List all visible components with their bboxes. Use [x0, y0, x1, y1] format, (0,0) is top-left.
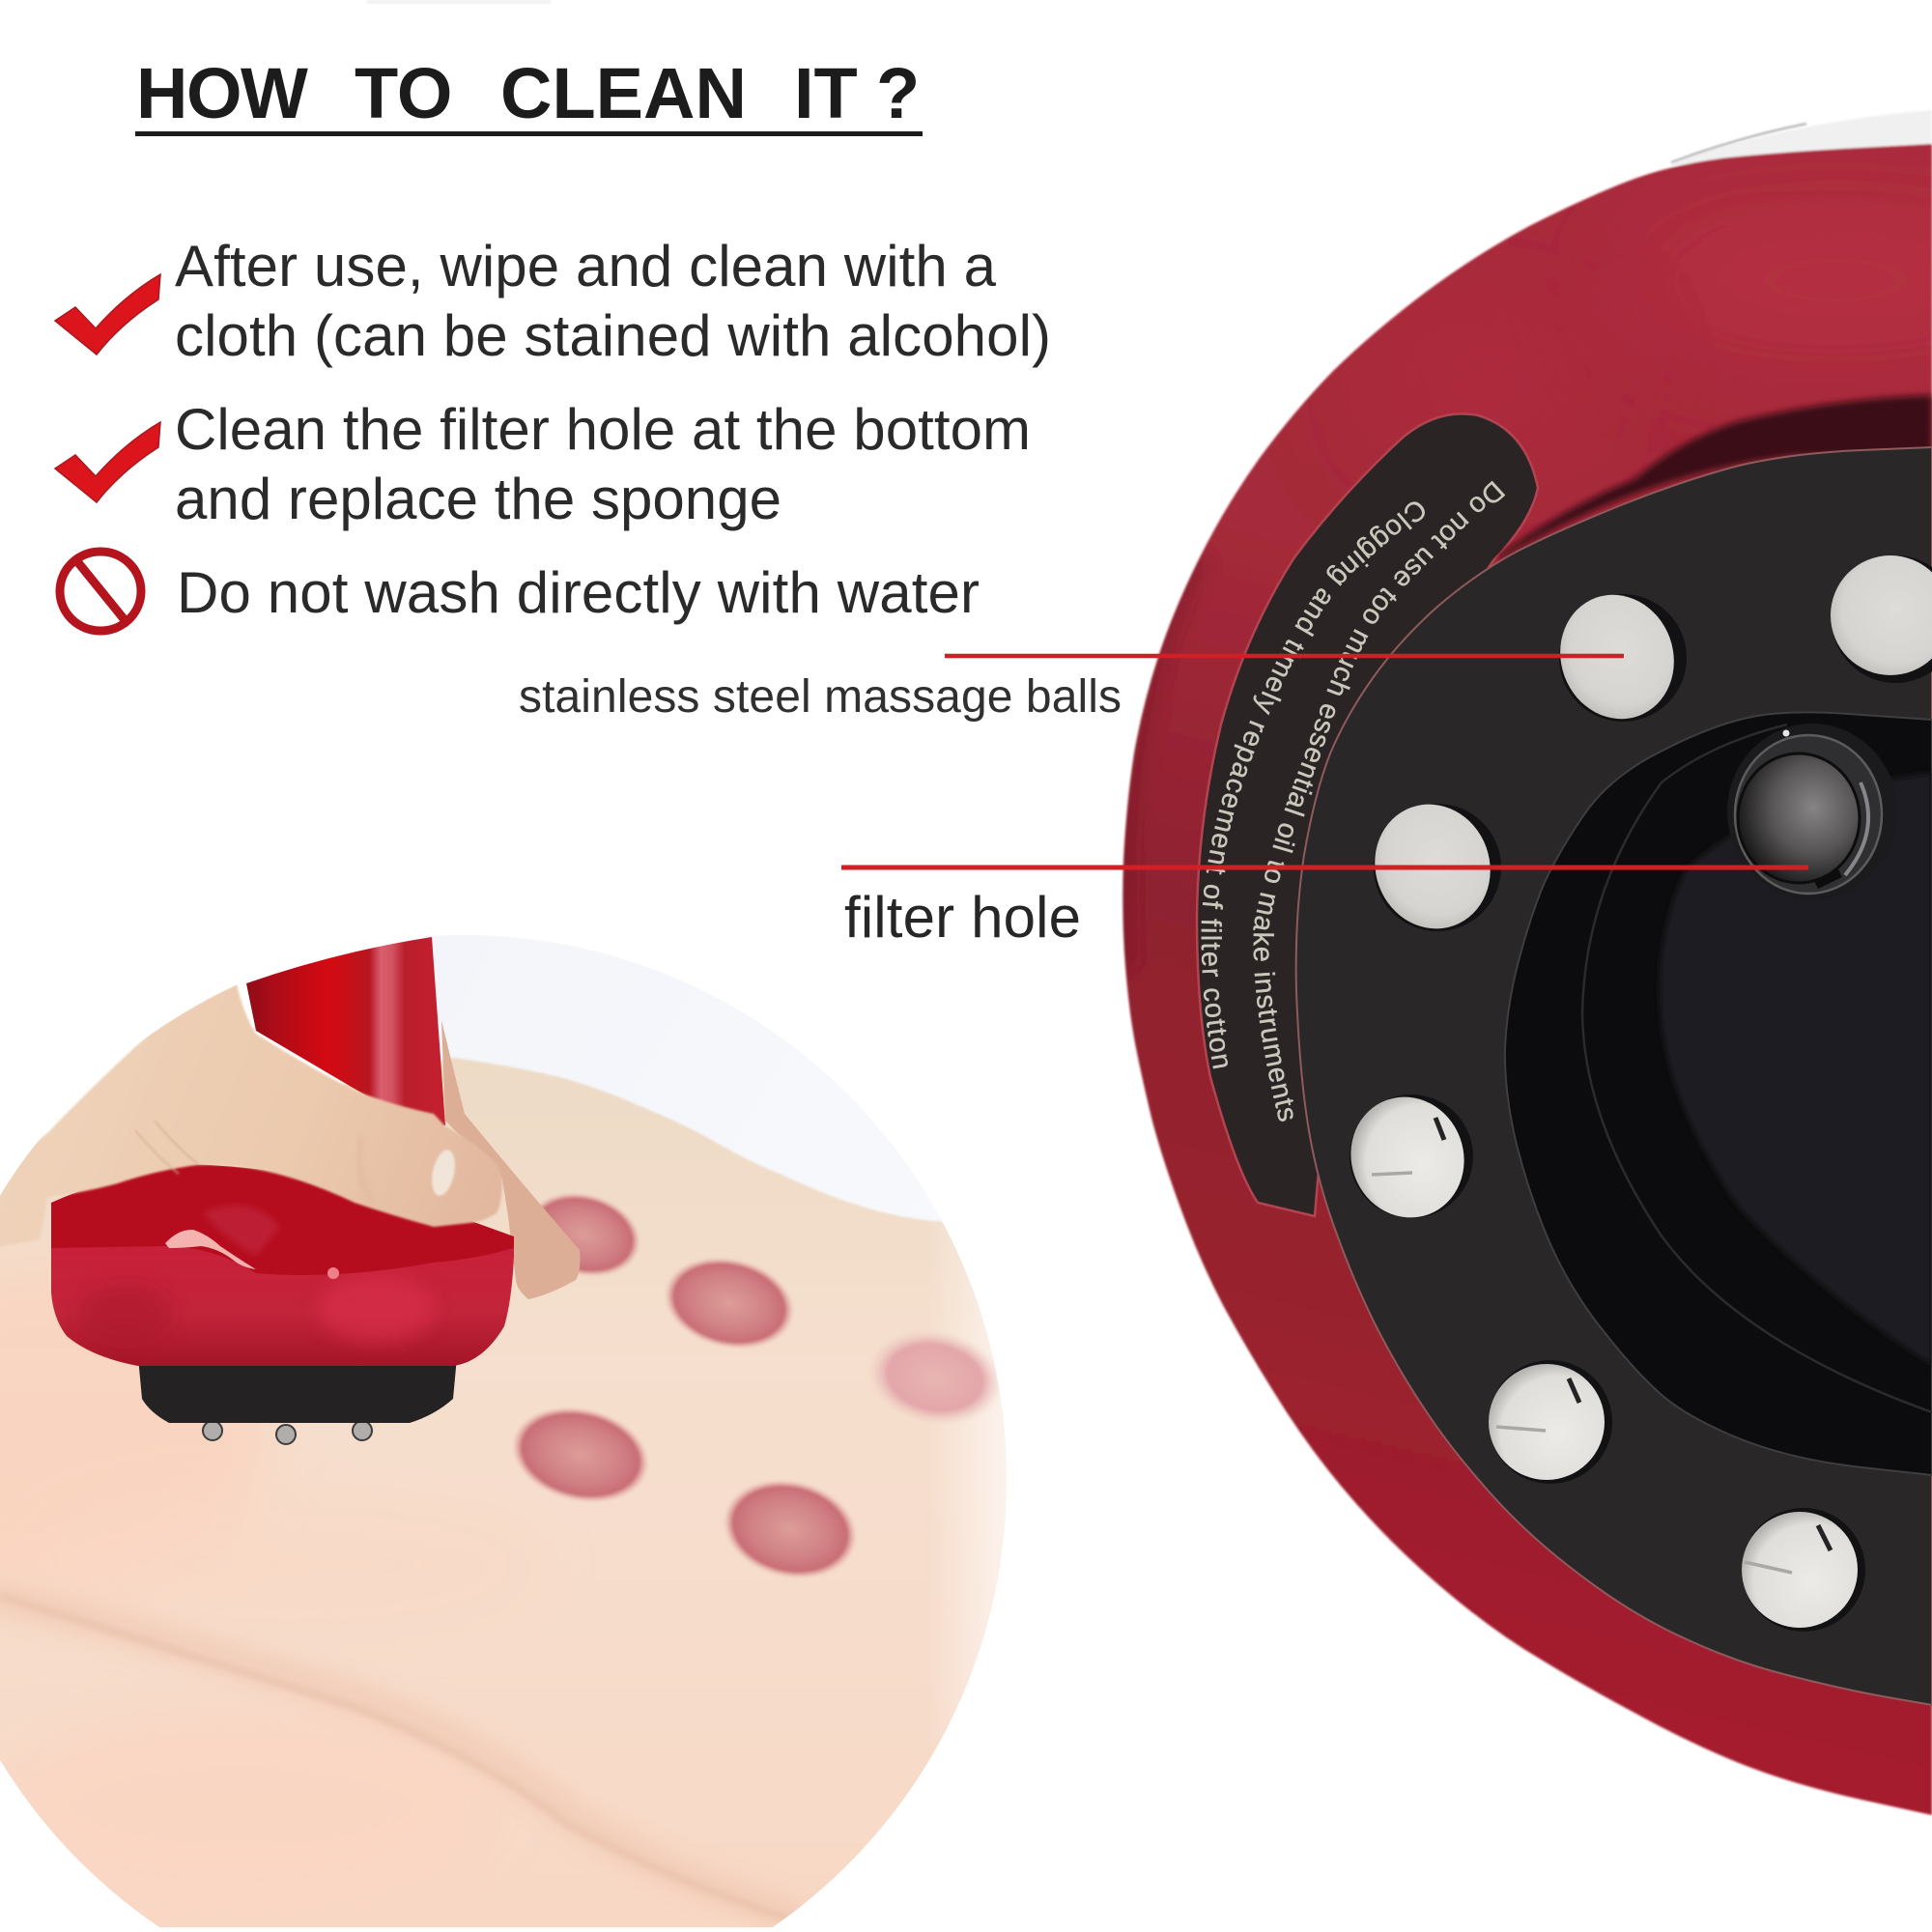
- faint cropped text remnant at top: [367, 0, 551, 4]
- title: HOW: [136, 53, 308, 133]
- leader line: massage balls: [945, 654, 1624, 658]
- instruction 1: cloth (can be stained with alcohol): [175, 303, 1051, 368]
- long finger behind device: [441, 1020, 580, 1299]
- cleaning instructions list: [55, 234, 1051, 631]
- device handle: [246, 937, 445, 1130]
- sticker warning text: Clogging and timely repacement of filter cotton: [1202, 501, 1425, 1068]
- skin: [0, 1058, 1063, 1932]
- device red body: [51, 1164, 514, 1366]
- hand: [0, 983, 502, 1248]
- leader line: filter hole: [841, 866, 1808, 869]
- instruction 3: Do not wash directly with water: [177, 560, 980, 625]
- title: [135, 53, 923, 136]
- filter hole knob: [1727, 724, 1897, 899]
- product close-up: device underside: [841, 110, 1932, 1816]
- dark gap above disc: [1498, 395, 1932, 560]
- device base and balls: [138, 1357, 457, 1444]
- instruction 1: After use, wipe and clean with a: [175, 234, 997, 298]
- label: filter hole: filter hole: [844, 885, 1081, 950]
- stainless steel massage balls: [1334, 555, 1932, 1632]
- cupping marks: [513, 1193, 999, 1578]
- grey centre plate: [1660, 773, 1932, 1365]
- title: ?: [876, 53, 920, 133]
- red outer housing: [1122, 110, 1932, 1815]
- photo: device used on back with cupping marks: [0, 927, 1063, 1932]
- title: CLEAN: [500, 53, 747, 133]
- instruction 2: and replace the sponge: [175, 467, 781, 531]
- icon: red check mark 2: [55, 422, 160, 502]
- label: stainless steel massage balls: stainless steel massage balls: [519, 671, 1122, 723]
- black base disc: [1296, 447, 1932, 1705]
- instruction 2: Clean the filter hole at the bottom: [175, 397, 1031, 462]
- sticker warning text: Do not use too much essential oil to make instruments: [1253, 481, 1505, 1122]
- title: IT: [794, 53, 858, 133]
- icon: prohibition sign: [60, 552, 141, 631]
- black warning sticker: [1197, 413, 1538, 1216]
- recessed inner circle: [1505, 712, 1932, 1475]
- icon: red check mark 1: [55, 274, 160, 355]
- photo background: [425, 935, 937, 1219]
- title: TO: [355, 53, 452, 133]
